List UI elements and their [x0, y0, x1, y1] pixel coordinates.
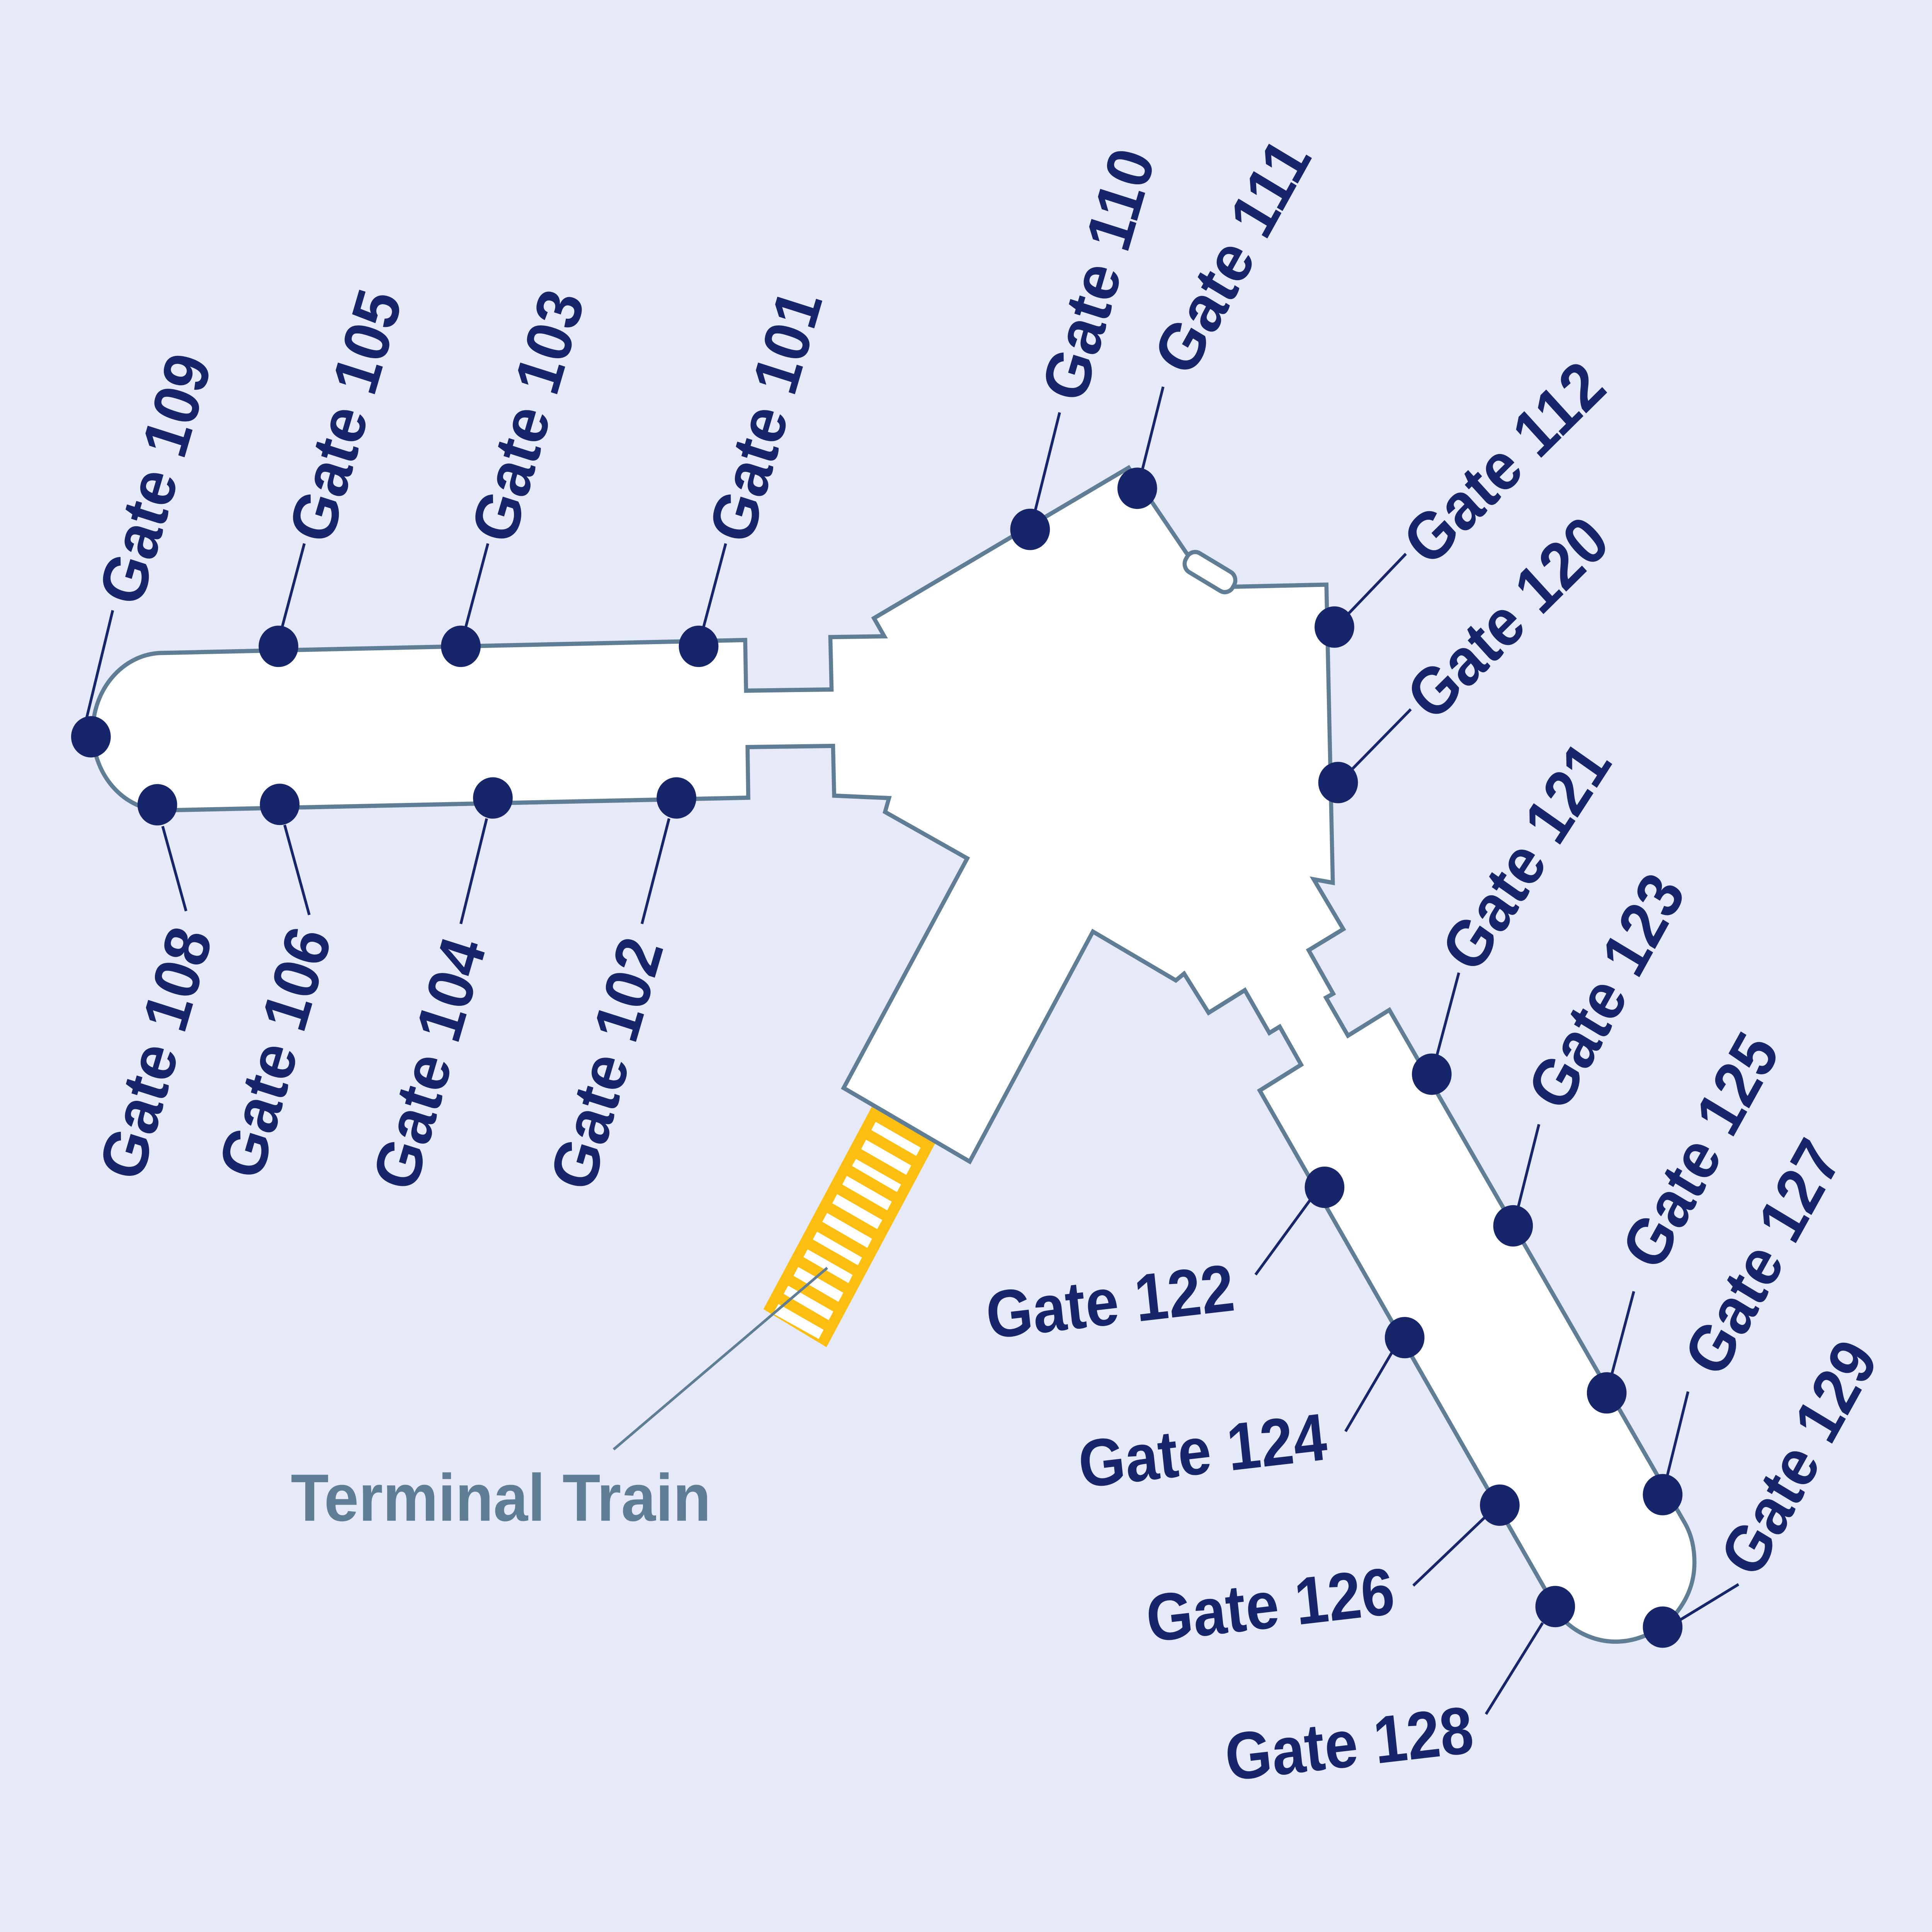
gate labels: Gate 123 [1515, 862, 1700, 1122]
gate leader lines [86, 387, 1738, 1714]
gate labels: Gate 120 [1394, 503, 1623, 735]
gate labels: Gate 102 [537, 929, 678, 1198]
gate labels: Gate 105 [276, 282, 417, 551]
gate labels: Gate 127 [1671, 1128, 1856, 1388]
terminal train label: Terminal Train [291, 1462, 711, 1536]
gate labels: Gate 108 [86, 919, 227, 1188]
gate labels: Gate 109 [86, 345, 226, 613]
gate labels: Gate 121 [1429, 730, 1626, 984]
gate labels: Gate 122 [983, 1252, 1238, 1354]
gate markers [71, 468, 1682, 1648]
gate labels: Gate 125 [1609, 1021, 1794, 1281]
gate labels: Gate 101 [696, 282, 837, 551]
terminal train leader line [614, 1268, 827, 1449]
gate labels: Gate 128 [1222, 1694, 1477, 1796]
terminal building outline [93, 468, 1694, 1642]
gate labels: Gate 129 [1707, 1328, 1892, 1588]
terminal train platform [764, 1107, 935, 1347]
jet bridge capsule [1181, 548, 1239, 596]
gate labels: Gate 126 [1143, 1554, 1398, 1657]
gate labels: Gate 106 [206, 919, 346, 1187]
gate labels: Gate 104 [360, 929, 500, 1198]
gate labels: Gate 110 [1029, 141, 1170, 409]
gate labels: Gate 124 [1075, 1400, 1330, 1503]
gate labels: Gate 111 [1140, 127, 1325, 387]
gate labels: Gate 112 [1390, 348, 1619, 580]
gate labels: Gate 103 [458, 282, 599, 551]
